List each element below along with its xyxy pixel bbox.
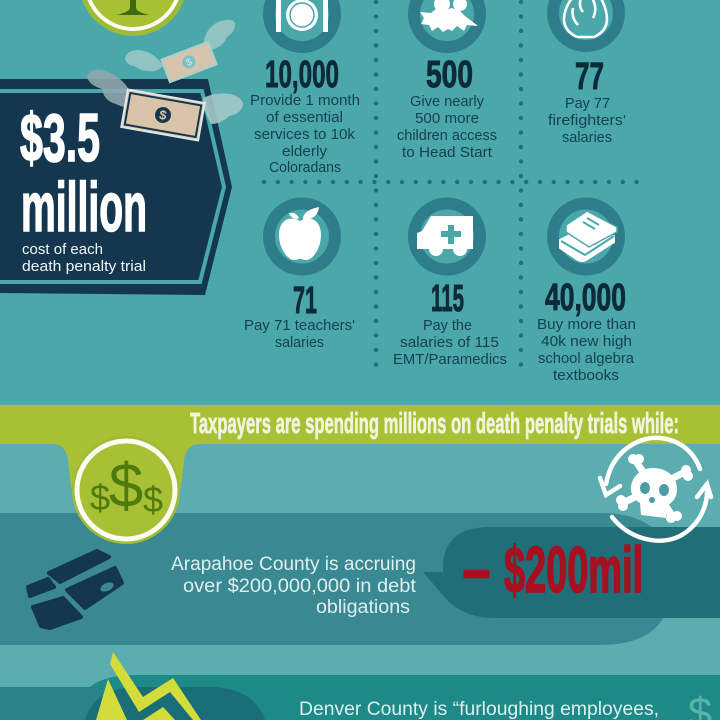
icon: flying money bottom: $ [158,107,169,123]
stat: 10,000: of essential [266,110,343,126]
icon: dollar signs: $ [109,452,143,521]
icon: broken credit card [28,551,122,628]
stat: 10,000: Coloradans [269,160,341,176]
stat: 77: salaries [562,130,612,146]
header band [0,405,720,544]
stat: 71: Pay 71 teachers' [244,318,355,334]
stat: 500: 500 [426,54,473,96]
stat: 10,000: services to 10k [254,127,356,143]
icon: children [414,0,480,47]
stat: 115: 115 [431,278,464,320]
stat: 71: 71 [293,280,317,322]
stat: 40,000: school algebra [538,351,635,367]
stat: 115: Pay the [423,318,472,334]
icon: dollar signs [72,436,180,544]
stat: 10,000 [250,54,360,176]
icon: flame [553,0,619,46]
caption: cost of each trial [22,242,146,275]
icon: flying money bottom [87,70,243,140]
icon: dollar signs: $ [143,479,163,520]
top lime circle icon [79,0,187,36]
stat: 500: Give nearly [410,94,485,110]
stat: 40,000: 40k new high [541,334,632,350]
text: Denver County: Denver County is “furloughing employees, [299,699,659,720]
text: Arapahoe County: over $200,000,000 in debt [183,576,417,597]
text: Arapahoe County: Arapahoe County is accruing [171,554,416,575]
caption: cost of each trial: death penalty trial [22,259,146,275]
icon: falling arrow chart [96,652,201,720]
stat: 77 [548,56,626,146]
stat: 40,000: Buy more than [537,317,636,333]
icon: ambulance [414,204,480,270]
stat: 10,000: Provide 1 month [250,93,360,109]
icon: apple [269,204,335,270]
stat: 77: Pay 77 [565,96,610,112]
headline: $3.5: $3.5 [20,100,100,176]
stat: 40,000 [537,277,636,384]
stat: 10,000: elderly [282,144,328,160]
stat: 500: 500 more [415,111,479,127]
stat: 71: salaries [275,335,324,351]
text: Arapahoe County: obligations [316,597,410,618]
icon: plate and cutlery [269,0,335,47]
stat: 115: EMT/Paramedics [393,352,507,368]
icon: dollar signs: $ [90,477,110,518]
stat: 115 [393,278,507,368]
icon: flying money top [125,20,235,82]
headline: million: million [21,168,147,246]
panel: cost banner [0,79,232,295]
stat: 71 [244,280,355,351]
icon: books [553,204,619,270]
stat: 500: children access [397,128,497,144]
stat: 10,000: 10,000 [265,54,339,96]
stat: 40,000: textbooks [553,368,619,384]
callout: minus 200 million: – [463,536,490,603]
stat: 500 [397,54,497,161]
caption: cost of each trial: cost of each [22,242,103,258]
stat: 115: salaries of 115 [400,335,499,351]
dotted grid dividers [264,2,640,370]
stat: 500: to Head Start [402,145,492,161]
stat: 77: 77 [575,56,604,98]
stat: 40,000: 40,000 [545,277,626,319]
callout: minus 200 million [463,533,643,606]
text: Arapahoe County [171,554,417,618]
stat: 77: firefighters' [548,113,626,129]
icon: flying money top: $ [185,57,194,69]
icon: skull with arrows [600,438,711,541]
panel: lower background bands [0,404,720,720]
